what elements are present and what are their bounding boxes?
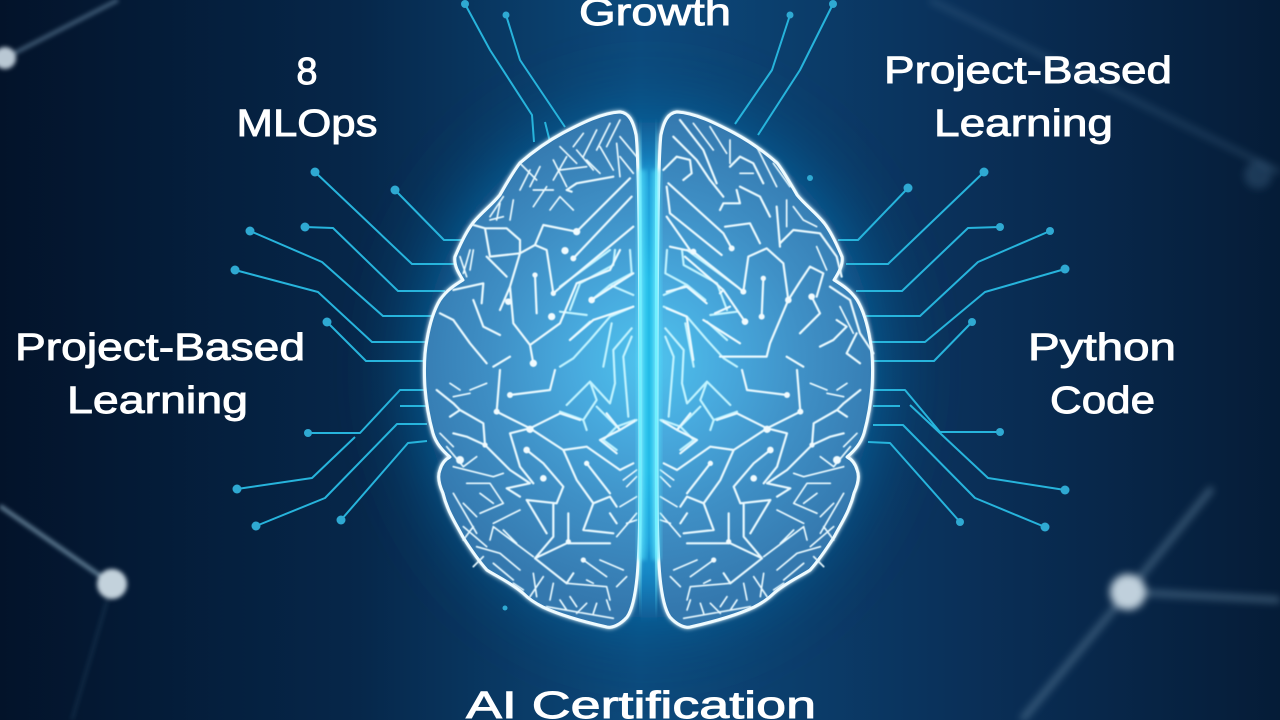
label: Python Code <box>1028 327 1176 422</box>
label: Project-Based Learning (top right) <box>884 50 1172 145</box>
brain: left hemisphere <box>424 112 640 627</box>
label: Python Code: Python <box>1028 327 1176 369</box>
central glow between hemispheres <box>628 118 668 623</box>
label: Project-Based Learning (left): Project-Based <box>15 327 305 369</box>
right upper folds <box>663 120 873 367</box>
blurred network: bottom left <box>0 506 127 720</box>
blurred network: top right <box>930 0 1280 189</box>
blurred network: bottom right <box>1022 488 1280 720</box>
brain halo glow <box>359 50 939 690</box>
label: 8 MLOps: MLOps <box>236 103 378 145</box>
bright midline edges <box>637 118 661 618</box>
label: Project-Based Learning (top right): Learning <box>934 103 1113 145</box>
right circuit connectors <box>735 0 1070 532</box>
label: Project-Based Learning (left): Learning <box>67 380 248 422</box>
label: Project-Based Learning (top right): Project-Based <box>884 50 1172 92</box>
left circuit connectors <box>230 0 565 610</box>
label: Project-Based Learning (left) <box>15 327 305 422</box>
label: Python Code: Code <box>1050 380 1155 422</box>
label: 8 MLOps: 8 <box>296 51 318 93</box>
label: 8 MLOps <box>236 51 378 145</box>
blurred network: top left <box>0 0 118 69</box>
brain: right hemisphere <box>657 112 873 627</box>
left upper folds <box>440 120 637 367</box>
